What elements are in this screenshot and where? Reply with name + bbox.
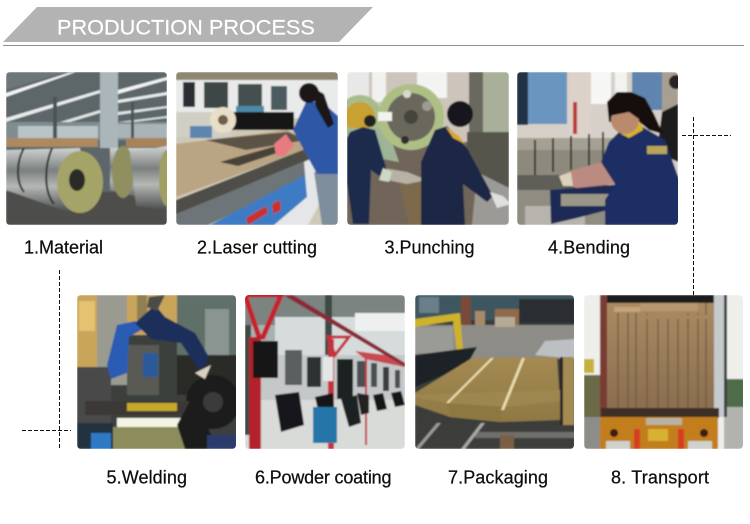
dashed crosshair: upper right [682,117,731,295]
step 6: powder coating [245,295,405,488]
photo: loaded truck [584,295,744,449]
caption: laser cutting: 2.Laser cutting [197,238,317,258]
dashed crosshair: lower left [22,270,71,449]
step 8: transport [584,295,744,488]
step 1: material [6,72,175,258]
step 4: bending [517,72,683,258]
photo: packaged cartons [415,295,575,449]
step 3: punching [338,72,511,258]
caption: packaging: 7.Packaging [448,468,548,488]
caption: powder coating: 6.Powder coating [255,468,392,488]
photo: punching press [338,72,511,225]
title banner [3,7,373,42]
step 5: welding [77,295,240,488]
caption: welding: 5.Welding [106,468,187,488]
photo: steel coils [6,72,175,225]
title text: PRODUCTION PROCESS [57,14,315,40]
caption: transport: 8. Transport [611,468,709,488]
photo: welding robot [77,295,240,449]
step 7: packaging [415,295,575,488]
photo: bending machine [517,72,683,225]
caption: punching: 3.Punching [384,238,475,258]
photo: laser cutting [176,72,338,225]
photo: powder coating line [245,295,405,449]
caption: material: 1.Material [24,238,103,258]
step 2: laser cutting [176,72,338,258]
caption: bending: 4.Bending [548,238,630,258]
